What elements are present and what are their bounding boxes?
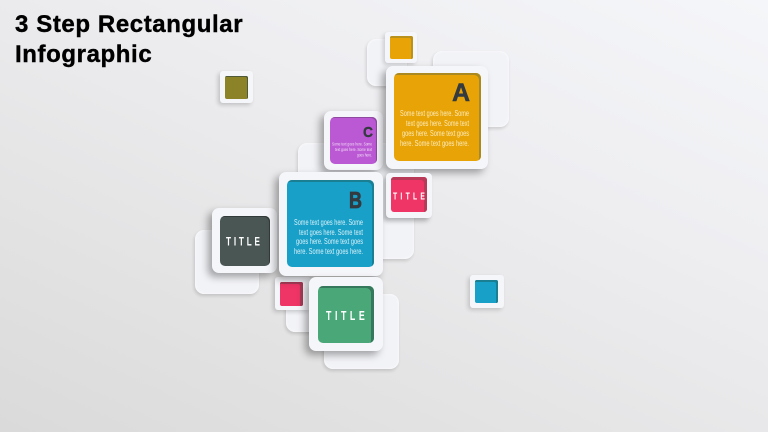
green title face	[318, 286, 374, 343]
ghost tile behind green title	[324, 294, 399, 369]
red title face	[391, 177, 427, 212]
panel A body text	[400, 109, 470, 148]
panel A face	[394, 73, 481, 161]
title: Infographic	[15, 40, 152, 68]
icon: gold small square	[385, 32, 417, 63]
ghost tile behind panel B	[298, 143, 414, 259]
dark title face	[220, 216, 270, 266]
panel: B	[279, 172, 383, 276]
red title label: TITLE	[393, 190, 425, 202]
title: 3 Step Rectangular	[15, 11, 243, 38]
ghost tile below red square	[286, 300, 322, 332]
ghost tile behind gold square	[367, 39, 407, 86]
letter A: A	[452, 79, 470, 107]
panel B body text	[294, 218, 364, 256]
ghost tile behind dark title	[195, 230, 259, 294]
panel B face	[287, 180, 374, 267]
letter C: C	[363, 124, 373, 141]
ghost tile behind panel A	[433, 51, 509, 127]
panel: C	[324, 111, 383, 170]
panel: A	[386, 66, 488, 169]
panel C body text	[332, 142, 373, 158]
panel: red title	[386, 173, 432, 218]
green title label: TITLE	[326, 309, 365, 324]
dark title label: TITLE	[226, 236, 260, 249]
panel: small red square	[275, 277, 311, 310]
title	[15, 11, 243, 68]
panel: dark title	[212, 208, 277, 273]
icon: olive small square	[220, 71, 253, 103]
panel C face	[330, 117, 377, 164]
small red face	[280, 282, 303, 306]
panel: green title	[309, 277, 383, 351]
letter B: B	[349, 187, 362, 213]
icon: blue small square	[470, 275, 504, 308]
